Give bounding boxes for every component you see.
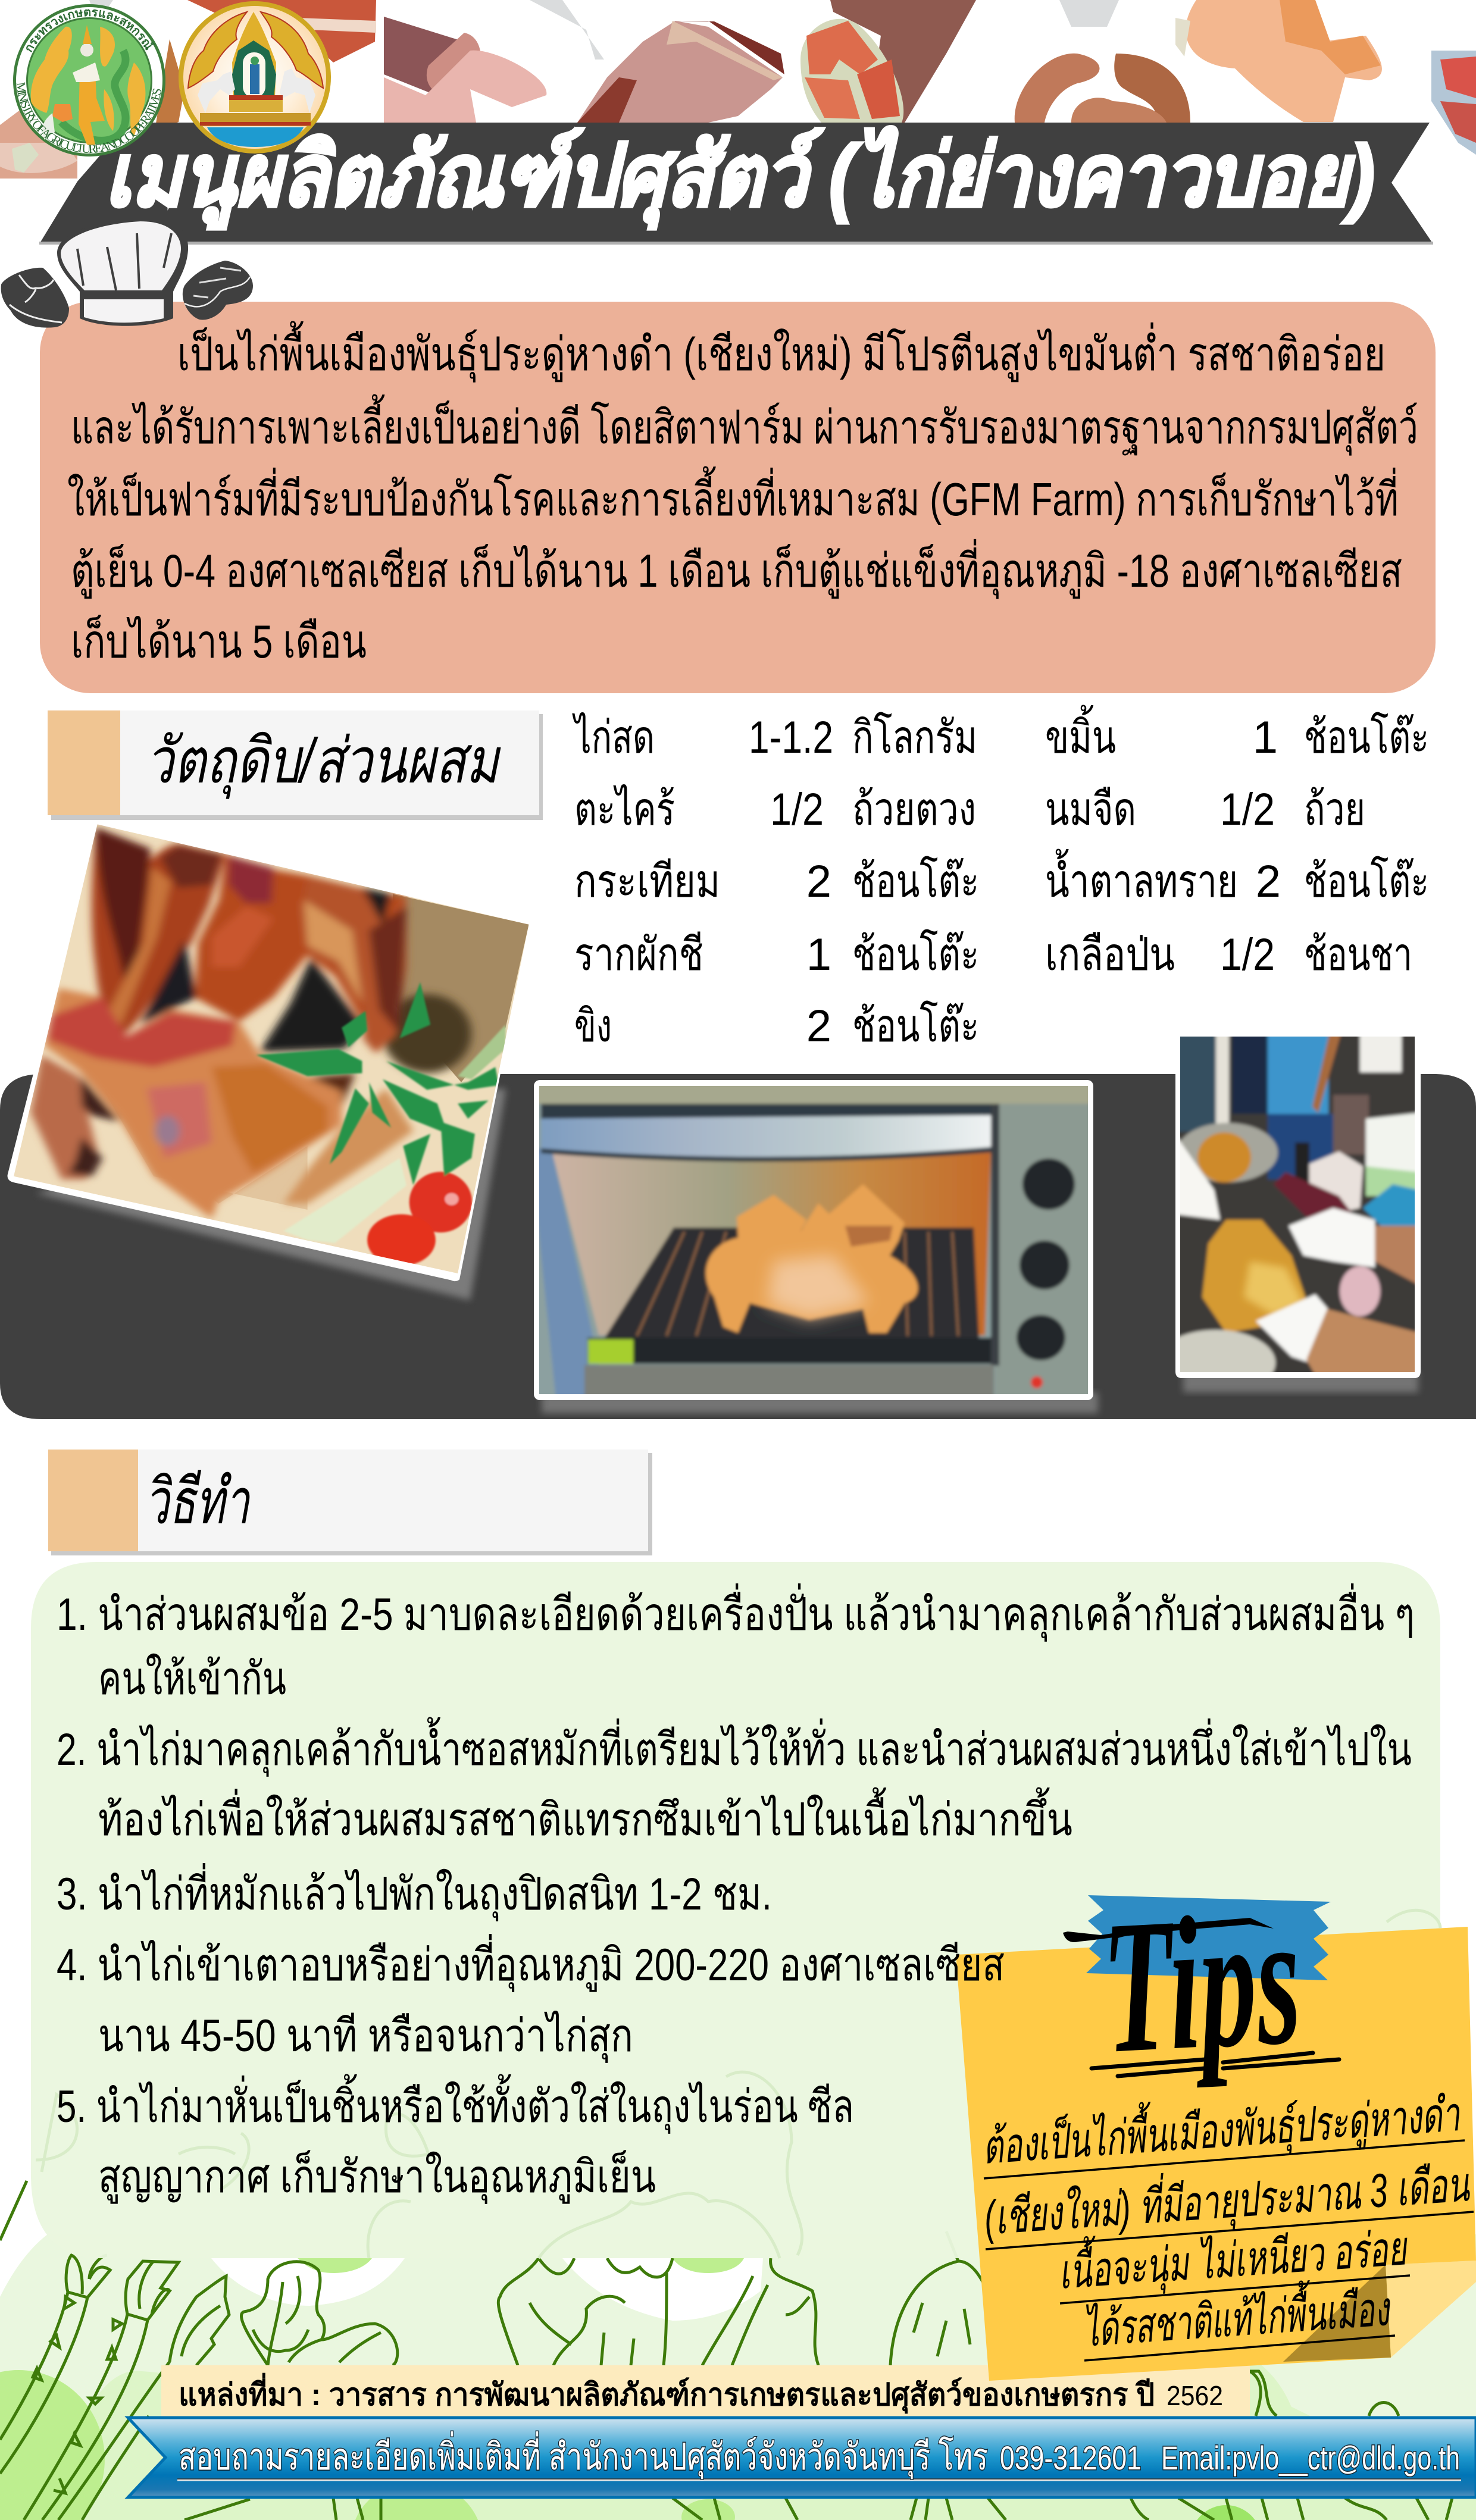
ingredient column 2: 1 xyxy=(1253,712,1278,763)
photo: chicken in oven xyxy=(524,1071,1102,1413)
icon: right steak xyxy=(183,261,253,320)
ingredient column 1: 1-1.2 xyxy=(749,712,833,763)
ingredient column 1: 2 xyxy=(806,1001,831,1051)
horses xyxy=(198,71,235,113)
right leg xyxy=(283,1088,414,1204)
ingredient column 1: กิโลกรัม xyxy=(852,712,977,763)
illustration: lettuce xyxy=(498,2258,818,2365)
description text: เก็บได้นาน 5 เดือน xyxy=(71,615,367,668)
illustration: asparagus xyxy=(0,2255,229,2520)
ingredient column 1: รากผักชี xyxy=(574,929,703,980)
ingredient column 1: 1/2 xyxy=(770,784,824,835)
ingredient column 1: ช้อนโต๊ะ xyxy=(852,929,979,980)
ingredient column 2: 1/2 xyxy=(1220,929,1275,980)
ingredient column 2: นมจืด xyxy=(1045,784,1136,835)
illustration: cucumber xyxy=(890,2231,1000,2365)
right flames xyxy=(100,27,145,137)
title text: เมนูผลิตภัณฑ์ปศุสัตว์ (ไก่ย่างคาวบอย) xyxy=(105,126,1375,230)
step 4 xyxy=(57,1934,1005,2063)
step 1: คนให้เข้ากัน xyxy=(98,1653,286,1704)
ingredient column 1: ตะไคร้ xyxy=(574,784,675,835)
step 4: 4. นำไก่เข้าเตาอบหรือย่างที่อุณหภูมิ 200-220 องศาเซลเซียส xyxy=(57,1934,1005,1992)
heading: method xyxy=(48,1450,652,1555)
center body xyxy=(195,854,406,1052)
logo: department of livestock development xyxy=(179,1,331,154)
faded vegetable outlines in panel xyxy=(36,1910,1440,2258)
ingredient column 1: ขิง xyxy=(574,1001,612,1051)
ingredient column 1: กระเทียม xyxy=(574,856,720,907)
ornament left xyxy=(188,12,247,88)
icon: chef hat xyxy=(57,217,188,326)
ingredient column 1: ช้อนโต๊ะ xyxy=(852,1000,979,1051)
step 2: ท้องไก่เพื่อให้ส่วนผสมรสชาติแทรกซึมเข้าไปในเนื้อไก่มากขึ้น xyxy=(98,1787,1072,1845)
ingredient column 2: ขมิ้น xyxy=(1045,705,1116,763)
ingredient list xyxy=(571,705,1429,1051)
logo: ministry of agriculture and cooperatives xyxy=(13,4,165,156)
basil leaves xyxy=(256,982,499,1185)
left flames xyxy=(31,27,72,113)
ornament right xyxy=(261,12,323,88)
icon: left steak xyxy=(1,268,69,328)
ingredient column 2: 1/2 xyxy=(1220,784,1275,835)
heading: method: วิธีทำ xyxy=(145,1467,251,1537)
spring onion xyxy=(283,1158,406,1243)
step 1 xyxy=(57,1583,1415,1704)
ingredient column 2: ช้อนชา xyxy=(1304,929,1412,980)
tomatoes xyxy=(409,1172,472,1232)
illustration: lower vegetable lines xyxy=(185,2303,1452,2520)
icon: chef hat with steaks xyxy=(1,217,253,328)
ingredient column 1: ช้อนโต๊ะ xyxy=(852,856,979,907)
step 5: สูญญากาศ เก็บรักษาในอุณหภูมิเย็น xyxy=(98,2150,656,2204)
logo: ministry of agriculture and cooperatives: MINISTRY OF AGRICULTURE AND COOPERATIVES xyxy=(17,82,161,154)
ingredient column 2: น้ำตาลทราย xyxy=(1045,849,1238,907)
ingredient column 1: 1 xyxy=(806,929,831,980)
ingredient column 2: 2 xyxy=(1256,856,1281,907)
ingredient column 2 xyxy=(1045,705,1429,980)
logo: ministry of agriculture and cooperatives: กระทรวงเกษตรและสหกรณ์ xyxy=(26,9,155,52)
heading: ingredients xyxy=(48,710,543,820)
source note: แหล่งที่มา : วารสาร การพัฒนาผลิตภัณฑ์การเกษตรและปศุสัตว์ของเกษตรกร ปี xyxy=(179,2373,1155,2414)
tips note xyxy=(956,1873,1476,2381)
step 2 xyxy=(57,1717,1412,1845)
note paper with folded corner xyxy=(956,1927,1476,2381)
deity figure xyxy=(79,70,105,145)
title banner xyxy=(39,123,1433,245)
ingredient column 1: ถ้วยตวง xyxy=(852,784,976,835)
step 3: 3. นำไก่ที่หมักแล้วไปพักในถุงปิดสนิท 1-2 ชม. xyxy=(57,1863,772,1921)
tips wordmark xyxy=(1063,1873,1339,2093)
contact ribbon xyxy=(128,2418,1476,2497)
naga xyxy=(61,51,126,140)
source note: 2562 xyxy=(1167,2380,1223,2411)
temple arch xyxy=(232,12,276,98)
tips text xyxy=(980,2080,1474,2361)
step 5 xyxy=(57,2074,854,2204)
description text xyxy=(67,321,1418,668)
source note xyxy=(161,2365,1250,2418)
ingredient column 2: ช้อนโต๊ะ xyxy=(1304,856,1429,907)
illustration: left stem xyxy=(0,2181,27,2240)
step 4: นาน 45-50 นาที หรือจนกว่าไก่สุก xyxy=(98,2010,633,2063)
ingredient column 1: ไก่สด xyxy=(571,712,655,763)
banner shape xyxy=(39,123,1433,244)
panel: steps background xyxy=(31,1562,1440,2258)
panel: description xyxy=(40,302,1436,693)
photo: roasted chicken xyxy=(8,823,530,1300)
dark photo band xyxy=(0,1074,1476,1419)
ingredient column 1: 2 xyxy=(806,856,831,907)
left wing xyxy=(92,827,226,1035)
illustration: spinach xyxy=(242,2262,398,2365)
step 5: 5. นำไก่มาหั่นเป็นชิ้นหรือใช้ทั้งตัวใส่ในถุงไนร่อน ซีล xyxy=(57,2074,854,2134)
ingredient column 1 xyxy=(571,712,979,1051)
heading: ingredients: วัตถุดิบ/ส่วนผสม xyxy=(146,726,501,799)
tips wordmark: Tips xyxy=(1098,1873,1305,2093)
right wing xyxy=(301,879,406,1053)
ingredient column 2: ถ้วย xyxy=(1304,784,1365,835)
dark cavities xyxy=(140,940,196,1025)
background soft shapes xyxy=(0,2234,1476,2520)
contact ribbon: 039-312601 xyxy=(1000,2439,1142,2477)
contact ribbon: สอบถามรายละเอียดเพิ่มเติมที่ สำนักงานปศุสัตว์จังหวัดจันทบุรี โทร xyxy=(179,2431,988,2479)
blue tape xyxy=(1086,1895,1331,1980)
ingredient column 2: ช้อนโต๊ะ xyxy=(1304,712,1429,763)
illustration: meat products row xyxy=(0,0,1476,179)
illustration: vegetables background xyxy=(0,2181,1476,2520)
ingredient column 2: เกลือป่น xyxy=(1045,929,1175,980)
main body xyxy=(45,988,342,1219)
photo: preparing chicken xyxy=(1156,1029,1422,1395)
steps text xyxy=(57,1583,1415,2204)
left leg xyxy=(31,1055,99,1179)
